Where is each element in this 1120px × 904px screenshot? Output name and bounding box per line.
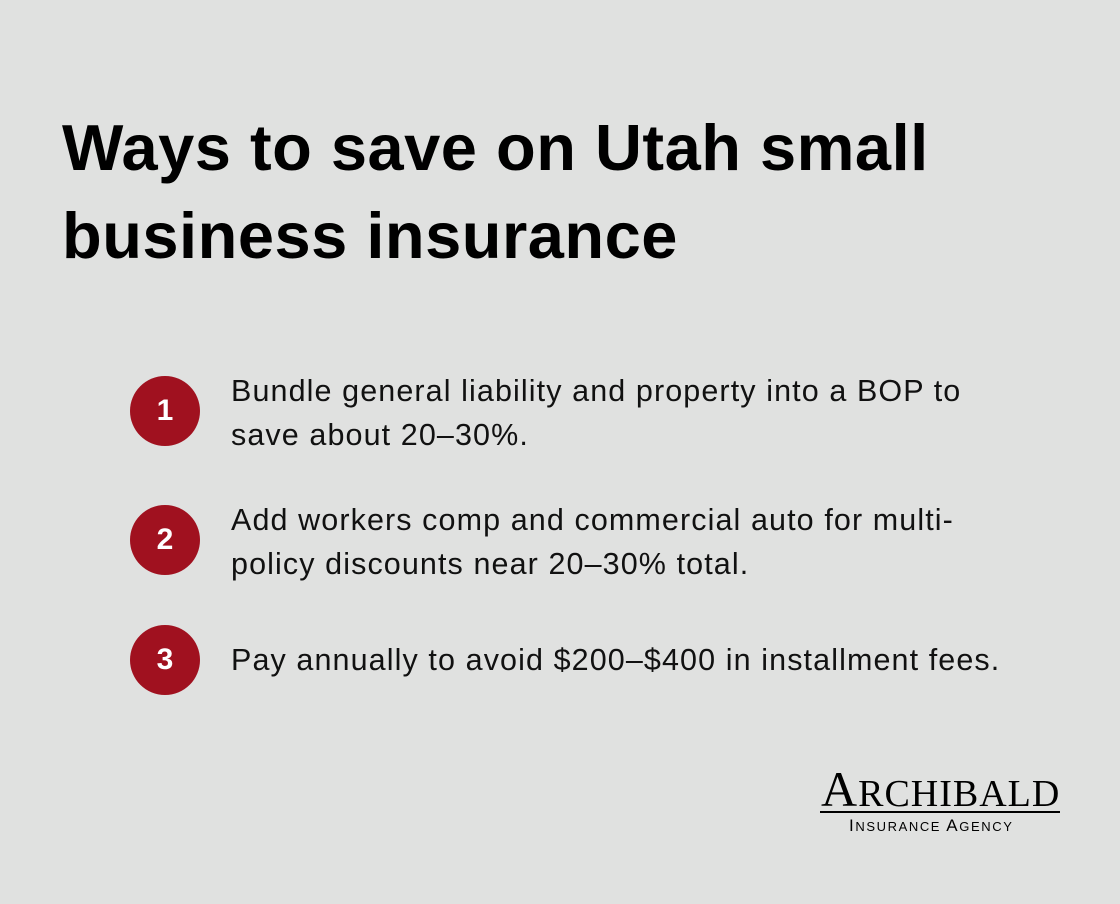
- text 2: [231, 503, 954, 581]
- badge 2: [130, 505, 200, 575]
- title: [62, 111, 929, 272]
- badge 2: 2: [157, 523, 173, 556]
- item 1: [130, 374, 961, 452]
- title: Ways to save on Utah small: [62, 111, 929, 184]
- badge 1: 1: [157, 394, 173, 427]
- logo: INSURANCE AGENCY: [849, 816, 1013, 835]
- badge 3: 3: [157, 643, 173, 676]
- badge 3: [130, 625, 200, 695]
- logo: ARCHIBALD: [821, 761, 1060, 817]
- text 1: save about 20–30%.: [231, 418, 529, 452]
- text 1: Bundle general liability and property into a BOP to: [231, 374, 961, 408]
- badge 1: [130, 376, 200, 446]
- text 3: Pay annually to avoid $200–$400 in installment fees.: [231, 643, 1000, 677]
- text 2: Add workers comp and commercial auto for multi-: [231, 503, 954, 537]
- item 3: [130, 625, 1000, 695]
- item 2: [130, 503, 954, 581]
- text 2: policy discounts near 20–30% total.: [231, 547, 749, 581]
- text 1: [231, 374, 961, 452]
- title: business insurance: [62, 199, 678, 272]
